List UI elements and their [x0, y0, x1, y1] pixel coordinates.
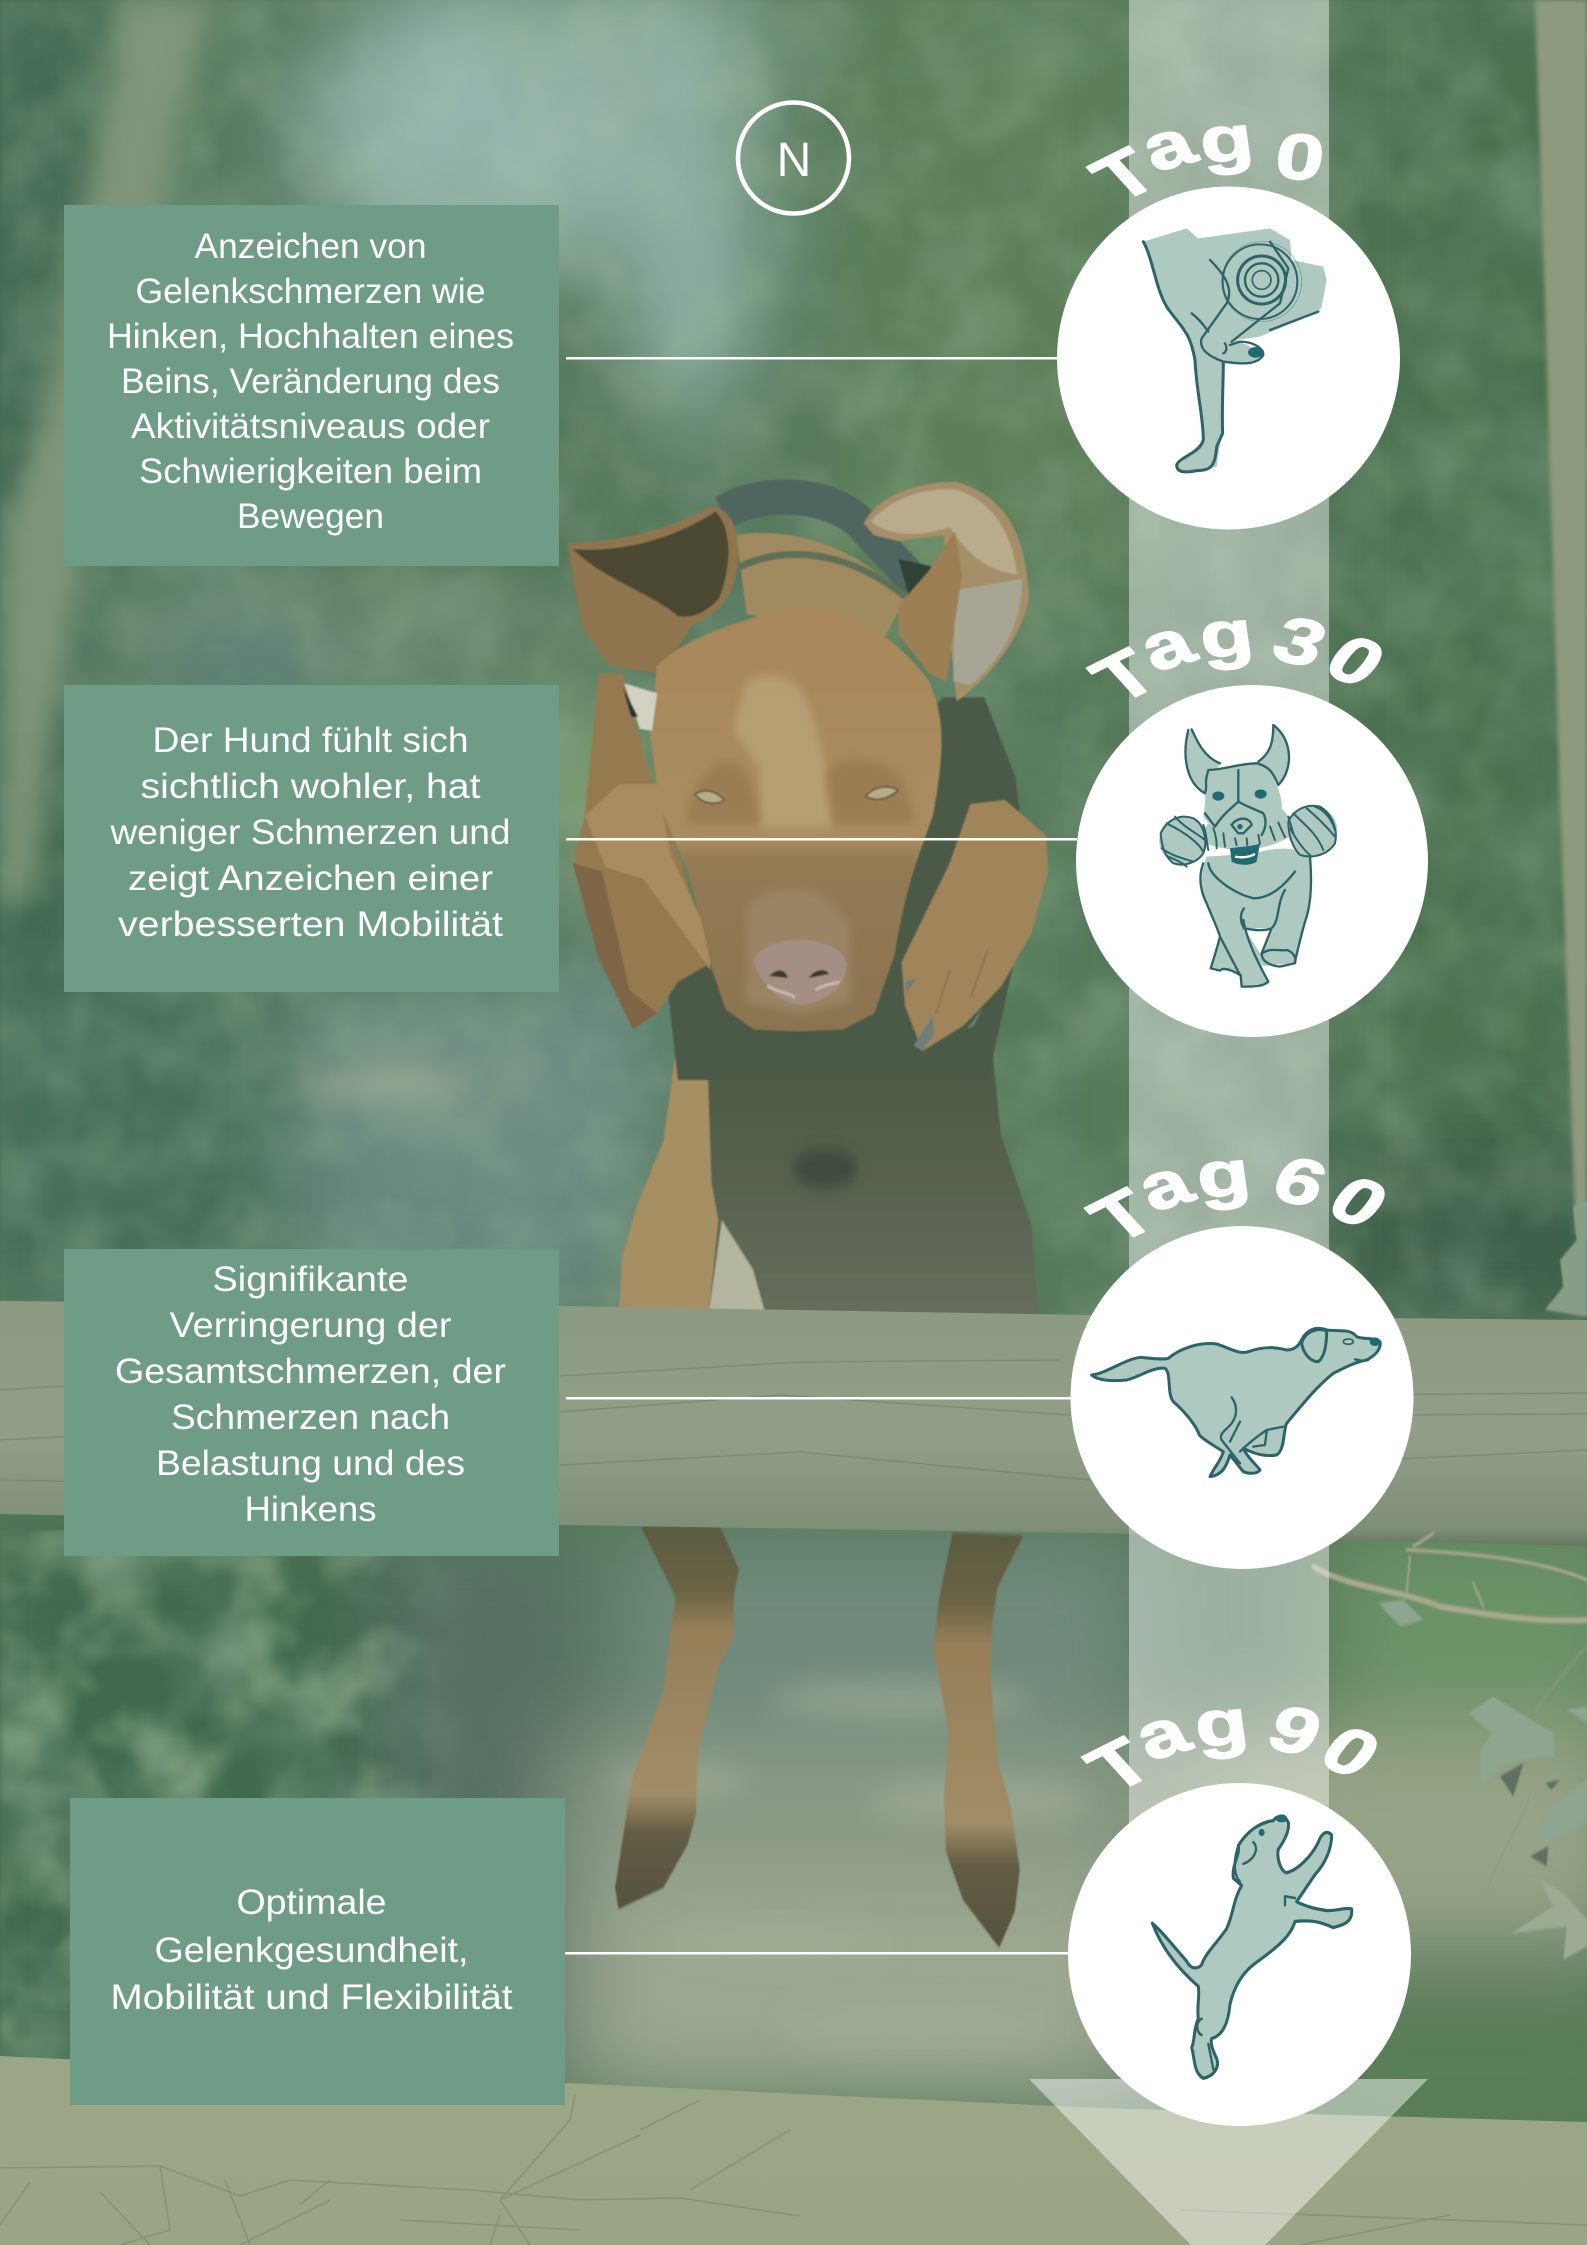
circle: Tag 30 [1076, 685, 1428, 1037]
icon: dog carrying rope toy [1159, 725, 1337, 987]
bright path streaks [290, 1067, 1090, 2056]
middle fence rail [0, 1301, 1587, 1546]
panel: Tag 0 symptoms: Gelenkschmerzen wie [136, 272, 486, 311]
panel: Tag 0 symptoms: Hinken, Hochhalten eines [107, 317, 514, 356]
panel: Tag 0 symptoms: Schwierigkeiten beim [139, 452, 482, 491]
eyes [695, 787, 898, 803]
panel: Tag 90 outcome: Optimale [236, 1883, 386, 1922]
panel: Tag 30 progress: zeigt Anzeichen einer [128, 859, 493, 898]
logo: N [777, 134, 811, 187]
skull and muzzle [650, 606, 941, 1031]
dog: head, ears and front legs [568, 482, 1048, 1080]
white cheek patch [624, 683, 657, 731]
panel: Tag 60 progress: Schmerzen nach [171, 1398, 450, 1437]
icon: dog leg with pain spiral [1143, 228, 1327, 473]
icon: running dog [1092, 1328, 1380, 1477]
heading: Tag 0: Tag 0 [1076, 102, 1329, 216]
logo [738, 102, 849, 214]
bottom fence rail [0, 2056, 1587, 2245]
panel: Tag 90 outcome [70, 1798, 565, 2105]
panel: Tag 60 progress: Verringerung der [170, 1306, 452, 1345]
foliage mottling [0, 0, 1587, 1320]
vertical timeline band [1129, 0, 1329, 2079]
right ear [864, 482, 1029, 701]
right paw [902, 800, 1048, 1051]
dog: body and thigh [619, 1000, 1039, 1318]
panel: Tag 0 symptoms: Anzeichen von [194, 227, 426, 266]
panel: Tag 60 progress [64, 1249, 559, 1556]
panel: Tag 60 progress: Hinkens [244, 1490, 376, 1529]
panel: Tag 90 outcome: Mobilität und Flexibilität [110, 1978, 513, 2017]
dark bush at lower left [0, 1530, 445, 2059]
nose [754, 940, 847, 1005]
heading: Tag 30: Tag 30 [1076, 593, 1400, 717]
panel: Tag 0 symptoms [64, 205, 559, 566]
panel: Tag 60 progress: Gesamtschmerzen, der [115, 1352, 506, 1391]
panel: Tag 0 symptoms: Bewegen [237, 497, 384, 536]
heading: Tag 60: Tag 60 [1074, 1133, 1403, 1257]
panel: Tag 30 progress: sichtlich wohler, hat [140, 767, 481, 806]
left foreleg [573, 674, 712, 1029]
heading: Tag 90: Tag 90 [1071, 1682, 1395, 1806]
panel: Tag 30 progress [64, 685, 559, 992]
left ear [568, 505, 738, 674]
panel: Tag 30 progress: verbesserten Mobilität [118, 905, 503, 944]
panel: Tag 0 symptoms: Aktivitätsniveaus oder [131, 407, 490, 446]
panel: Tag 0 symptoms: Beins, Veränderung des [121, 362, 500, 401]
panel: Tag 60 progress: Belastung und des [156, 1444, 465, 1483]
panel: Tag 60 progress: Signifikante [212, 1260, 408, 1299]
icon: jumping dog [1152, 1814, 1352, 2078]
arrow head [1029, 2079, 1428, 2245]
panel: Tag 90 outcome: Gelenkgesundheit, [154, 1931, 469, 1970]
circle: Tag 90 [1068, 1783, 1411, 2126]
connector lines [563, 357, 1077, 1954]
panel: Tag 30 progress: Der Hund fühlt sich [152, 721, 468, 760]
circle: Tag 60 [1070, 1226, 1414, 1569]
dog: hind legs [615, 1526, 1023, 1948]
tree trunk [0, 0, 215, 900]
branches and ivy leaves [1313, 1200, 1587, 1960]
circle: Tag 0 [1057, 186, 1400, 530]
panel: Tag 30 progress: weniger Schmerzen und [109, 813, 511, 852]
right fence post [1535, 0, 1587, 1235]
